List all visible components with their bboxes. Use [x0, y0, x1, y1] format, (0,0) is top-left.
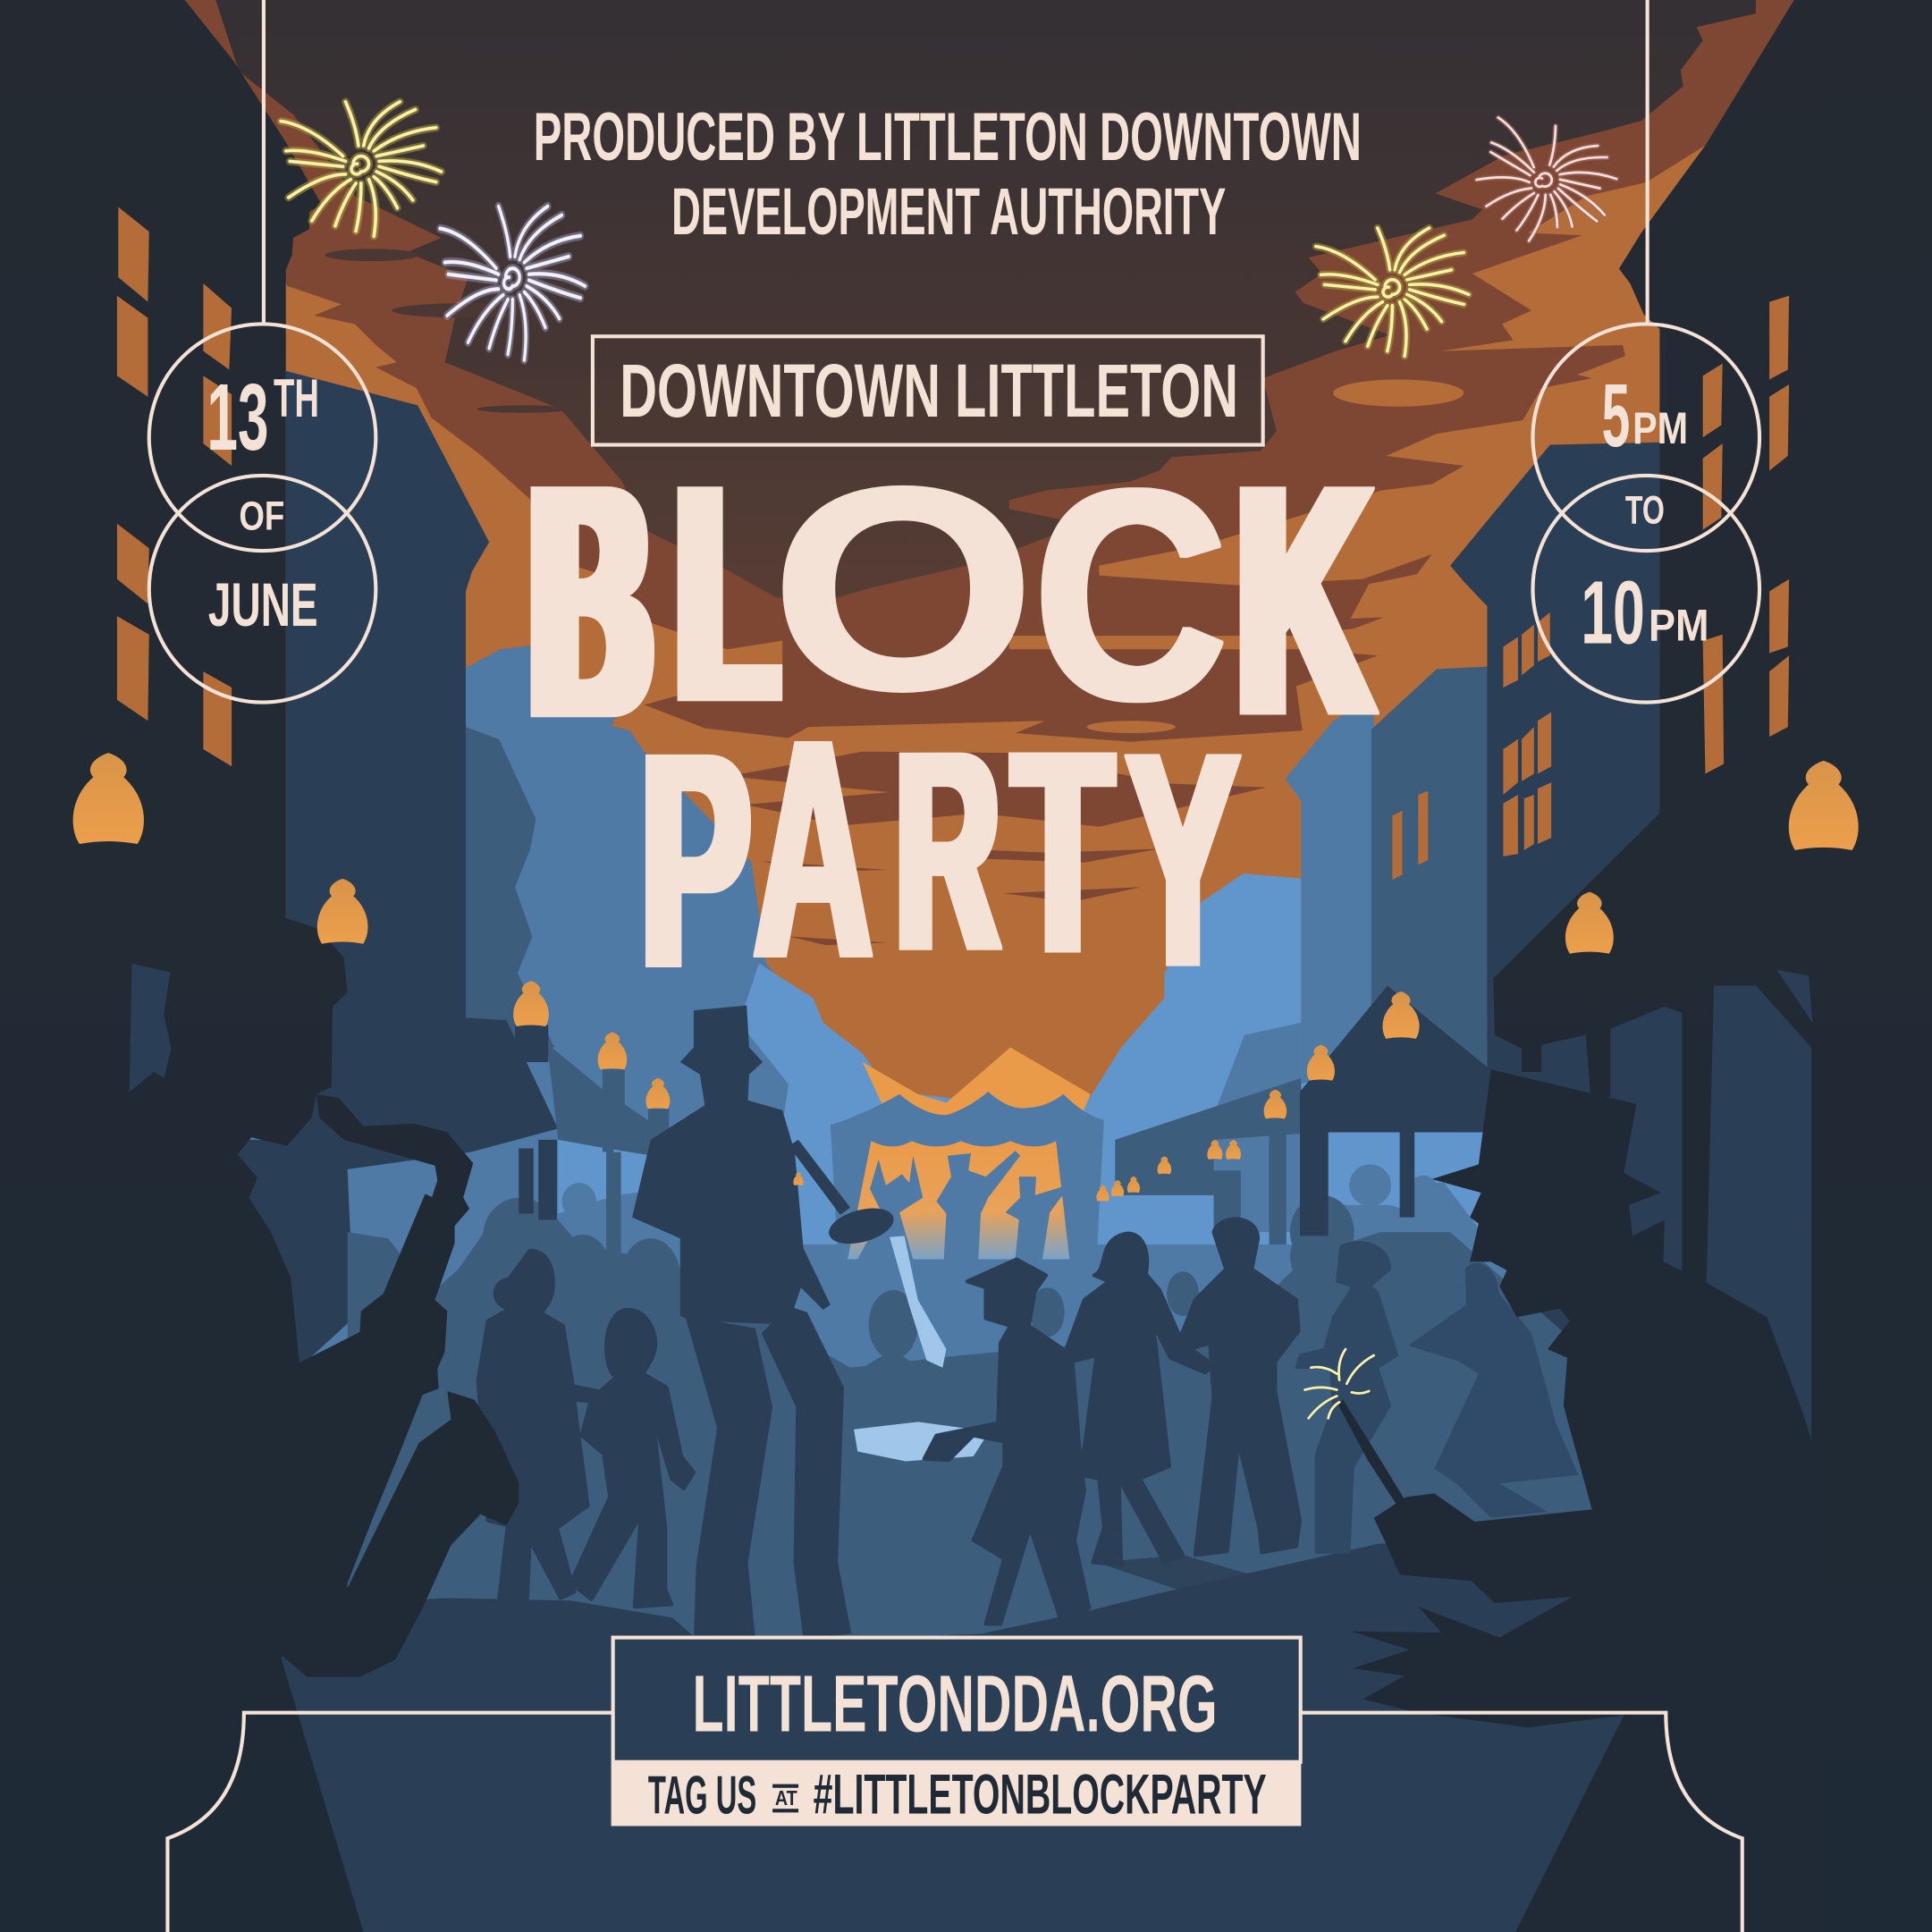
website and hashtag box: TAG US	[648, 1765, 756, 1826]
producer credit: PRODUCED BY LITTLETON DOWNTOWN	[534, 99, 1362, 175]
date: 13th of June: TH	[274, 367, 319, 428]
lanterns	[73, 753, 1859, 1202]
title: party	[641, 675, 1239, 1032]
ground and mid crowd	[348, 1195, 1602, 1651]
bracket gap on right building	[1776, 970, 1812, 1023]
child	[570, 1310, 694, 1607]
navy wall gap beside player	[130, 964, 172, 1092]
website and hashtag box: #LITTLETONBLOCKPARTY	[814, 1764, 1267, 1827]
saxophone player and left building	[0, 0, 519, 1932]
title: block: C	[1033, 427, 1228, 763]
time: 5pm to 10pm: TO	[1625, 489, 1665, 533]
website and hashtag box: AT	[775, 1786, 797, 1810]
far crowd	[561, 1164, 1528, 1244]
time: 5pm to 10pm: PM	[1632, 403, 1688, 453]
time: 5pm to 10pm: 10	[1581, 562, 1645, 662]
title: party: P	[641, 691, 750, 1032]
title: party: A	[754, 675, 873, 1022]
tent on the right	[1300, 986, 1487, 1236]
boy with cap	[924, 1260, 1089, 1624]
building windows	[1392, 612, 1551, 880]
navy street foreground	[281, 1528, 1626, 1932]
sparkler stick	[1338, 1400, 1405, 1506]
date: 13th of June	[207, 365, 319, 639]
figure far right	[1408, 1263, 1578, 1518]
dancing woman left	[478, 1251, 603, 1599]
title: block: B	[532, 416, 649, 787]
title: block	[532, 416, 1371, 787]
dancing man	[1179, 1219, 1300, 1555]
date: 13th of June: JUNE	[208, 570, 318, 639]
time: 5pm to 10pm	[1581, 366, 1709, 662]
website and hashtag box: LITTLETONDDA.ORG	[693, 1658, 1218, 1748]
time: 5pm to 10pm: PM	[1649, 601, 1709, 651]
street lamps and awnings on the left	[515, 1025, 1301, 1294]
woman right	[1296, 1242, 1397, 1553]
title: party: Y	[1126, 690, 1239, 1030]
title: block: K	[1237, 417, 1371, 783]
high windows right	[1703, 296, 1789, 774]
producer credit	[534, 99, 1362, 249]
website and hashtag box	[612, 1638, 1301, 1827]
title: party: T	[1013, 692, 1113, 1013]
stage tent and band	[831, 1092, 1104, 1260]
fireworks	[281, 102, 1630, 1418]
title: block: L	[678, 422, 776, 766]
title: party: R	[896, 693, 1000, 1009]
man with hat	[1352, 1069, 1824, 1932]
right building and awning	[1493, 0, 1932, 1932]
time: 5pm to 10pm: 5	[1602, 366, 1630, 466]
date: 13th of June: 13	[207, 365, 268, 470]
far buildings and blue sky	[222, 371, 1811, 1515]
guitarist	[632, 1006, 898, 1639]
producer credit: DEVELOPMENT AUTHORITY	[671, 174, 1226, 249]
title: block: O	[770, 426, 1036, 750]
location box	[593, 336, 1263, 445]
light blue juggling pin and blob	[854, 1236, 988, 1462]
date: 13th of June: OF	[239, 494, 284, 539]
dancing woman centre	[1067, 1234, 1214, 1565]
location box: DOWNTOWN LITTLETON	[620, 349, 1238, 433]
high windows left	[117, 207, 232, 766]
